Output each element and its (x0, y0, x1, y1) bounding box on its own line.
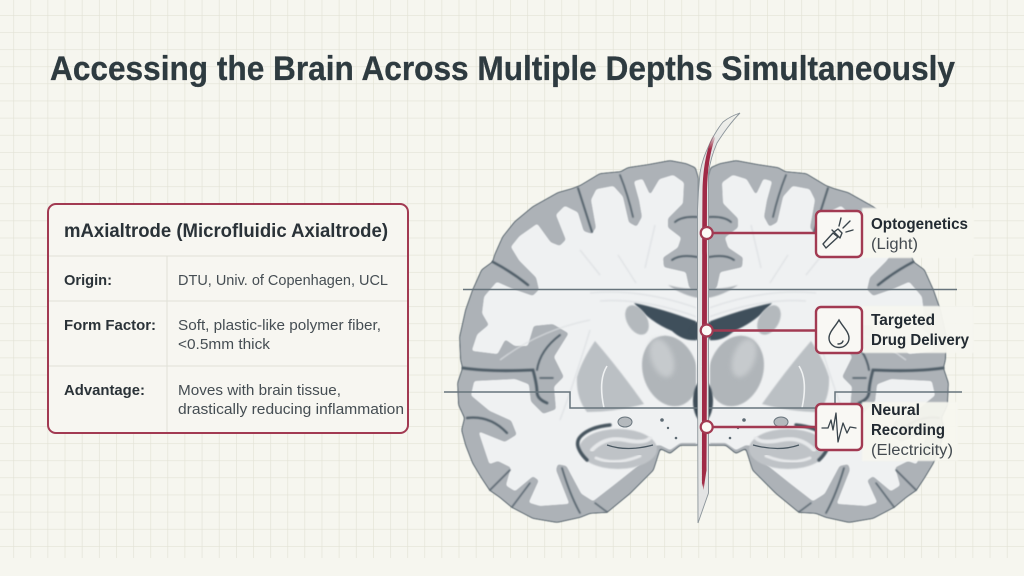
electrode probe (698, 113, 740, 523)
callout: neural recording: (Electricity) (871, 442, 953, 459)
central ventricle top (688, 322, 718, 340)
row: form factor: Soft, plastic-like polymer fiber, (178, 317, 381, 334)
panel: mAxialtrode specification table (48, 204, 408, 433)
depth guide lines (444, 290, 962, 408)
label: Targeted (871, 312, 935, 329)
title: Accessing the Brain Across Multiple Depths Simultaneously (50, 50, 955, 88)
label backing panels (862, 208, 974, 461)
row: origin: DTU, Univ. of Copenhagen, UCL (178, 272, 388, 289)
right hemisphere (699, 161, 948, 522)
icon: waveform (822, 413, 856, 442)
row: advantage (64, 382, 404, 418)
callout: targeted drug delivery: Drug Delivery (871, 332, 969, 349)
label: Neural (871, 402, 920, 419)
row: form factor (64, 317, 381, 353)
row: advantage: Moves with brain tissue, (178, 382, 341, 399)
icon: drop (829, 320, 849, 348)
row: origin: Origin: (64, 272, 112, 289)
callout: neural recording: Recording (871, 422, 945, 439)
left hemisphere (458, 161, 707, 522)
central white matter (696, 298, 710, 444)
icon: flashlight (823, 218, 853, 248)
callout: targeted drug delivery (701, 307, 969, 353)
row: origin (64, 272, 388, 289)
row: advantage: Advantage: (64, 382, 145, 399)
table heading: mAxialtrode (Microfluidic Axialtrode) (64, 221, 388, 242)
callout: optogenetics (701, 211, 968, 257)
row: advantage: drastically reducing inflammation (178, 401, 404, 418)
callout: optogenetics: (Light) (871, 236, 918, 253)
callout: neural recording (701, 402, 953, 459)
label: Optogenetics (871, 216, 968, 233)
brain coronal cross-section (458, 161, 948, 522)
row: form factor: <0.5mm thick (178, 336, 270, 353)
row: form factor: Form Factor: (64, 317, 156, 334)
third ventricle (693, 380, 713, 422)
